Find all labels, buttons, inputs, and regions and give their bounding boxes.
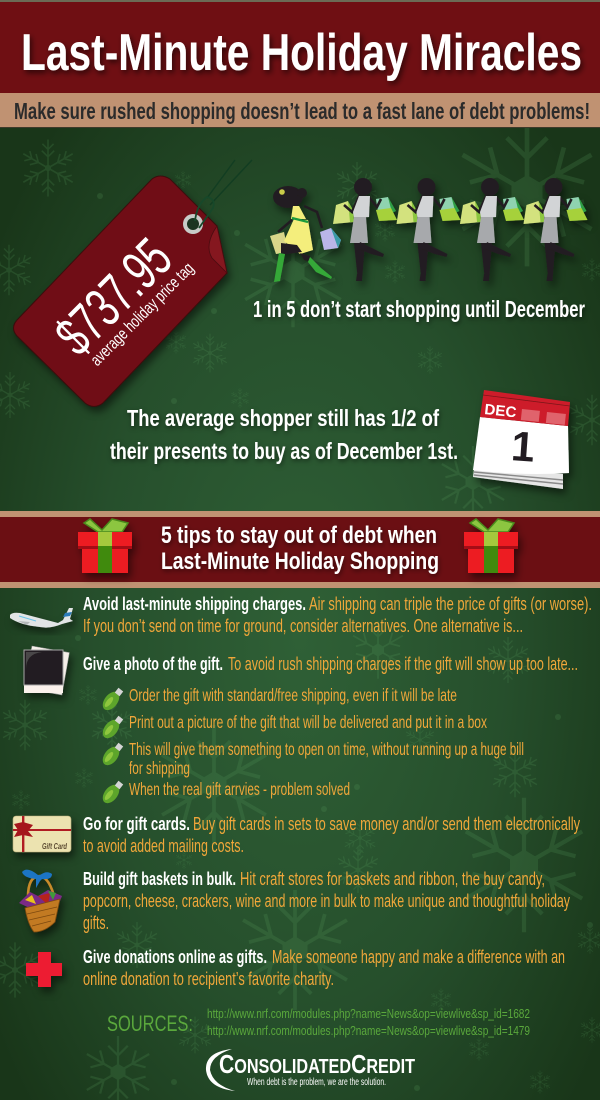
running shopper in yellow: [270, 186, 341, 282]
tip 2 text: [83, 653, 578, 674]
tip 1 text: [83, 593, 592, 636]
tip 1 text: Avoid last-minute shipping charges.: [83, 593, 306, 614]
icon: photo: [24, 646, 69, 695]
calendar mini months: [521, 409, 566, 425]
stat: half of presents: their presents to buy as of December 1st.: [110, 438, 458, 464]
bullet 1: [99, 685, 457, 713]
bullet list: [99, 685, 524, 806]
sources: SOURCES:: [107, 1011, 193, 1036]
shoppers illustration: [270, 178, 588, 282]
tag fold: [209, 226, 227, 273]
title banner: [0, 0, 600, 93]
logo: Consolidated Credit: CONSOLIDATEDCREDIT: [219, 1049, 415, 1079]
tip 4 text: [83, 868, 570, 933]
icon: gift basket: [19, 870, 62, 932]
logo: Consolidated Credit: When debt is the problem, we are the solution.: [247, 1077, 386, 1088]
icon: airplane: [10, 608, 73, 628]
tip 5 text: online donation to recipient’s favorite charity.: [83, 968, 334, 989]
subtitle band: [0, 93, 600, 128]
shopper silhouette 2: [396, 178, 460, 281]
tips banner: [0, 511, 600, 588]
tag eyelet: [183, 197, 214, 234]
icon: calendar: [473, 390, 570, 489]
tips heading: [161, 522, 439, 575]
tips heading: 5 tips to stay out of debt when: [161, 522, 437, 549]
stat: half of presents: The average shopper still has 1/2 of: [127, 405, 439, 431]
icon: calendar: 1: [510, 422, 536, 471]
logo: Consolidated Credit: [206, 1049, 415, 1091]
tip 5 text: Give donations online as gifts.: [83, 946, 267, 967]
tip 2 text: Give a photo of the gift.: [83, 653, 223, 674]
icon: gift card: Gift Card: [42, 842, 68, 851]
stat: half of presents: [110, 405, 458, 464]
icon: gift right: [464, 519, 518, 573]
shopper silhouette 4: [524, 178, 588, 281]
icon: gift card: [13, 816, 71, 852]
tips heading: Last-Minute Holiday Shopping: [161, 548, 439, 575]
icon: gift left: [78, 519, 132, 573]
tag price: $737.95: [43, 226, 184, 367]
bullet 4: [99, 779, 350, 806]
bullet 4: When the real gift arrvies - problem solved: [129, 779, 350, 799]
sources: [107, 1006, 530, 1038]
tip 3 text: to avoid added mailing costs.: [83, 835, 244, 856]
icon: calendar: DEC: [484, 401, 517, 421]
shopper silhouette 1: [333, 178, 397, 281]
tip 3 text: [83, 813, 581, 856]
tip 5 text: [83, 946, 565, 989]
tip 3 text: Go for gift cards.: [83, 813, 190, 834]
tip 4 text: gifts.: [83, 912, 109, 933]
tag caption: average holiday price tag: [87, 259, 198, 370]
bullet 2: [99, 712, 487, 741]
icon: red cross: [26, 952, 62, 987]
bullet 3: [99, 739, 524, 778]
price tag: [14, 160, 252, 406]
bullet 3: for shipping: [129, 758, 190, 778]
bullet 1: Order the gift with standard/free shipping, even if it will be late: [129, 685, 457, 705]
shopper silhouette 3: [460, 178, 524, 281]
tip 4 text: Build gift baskets in bulk.: [83, 868, 236, 889]
